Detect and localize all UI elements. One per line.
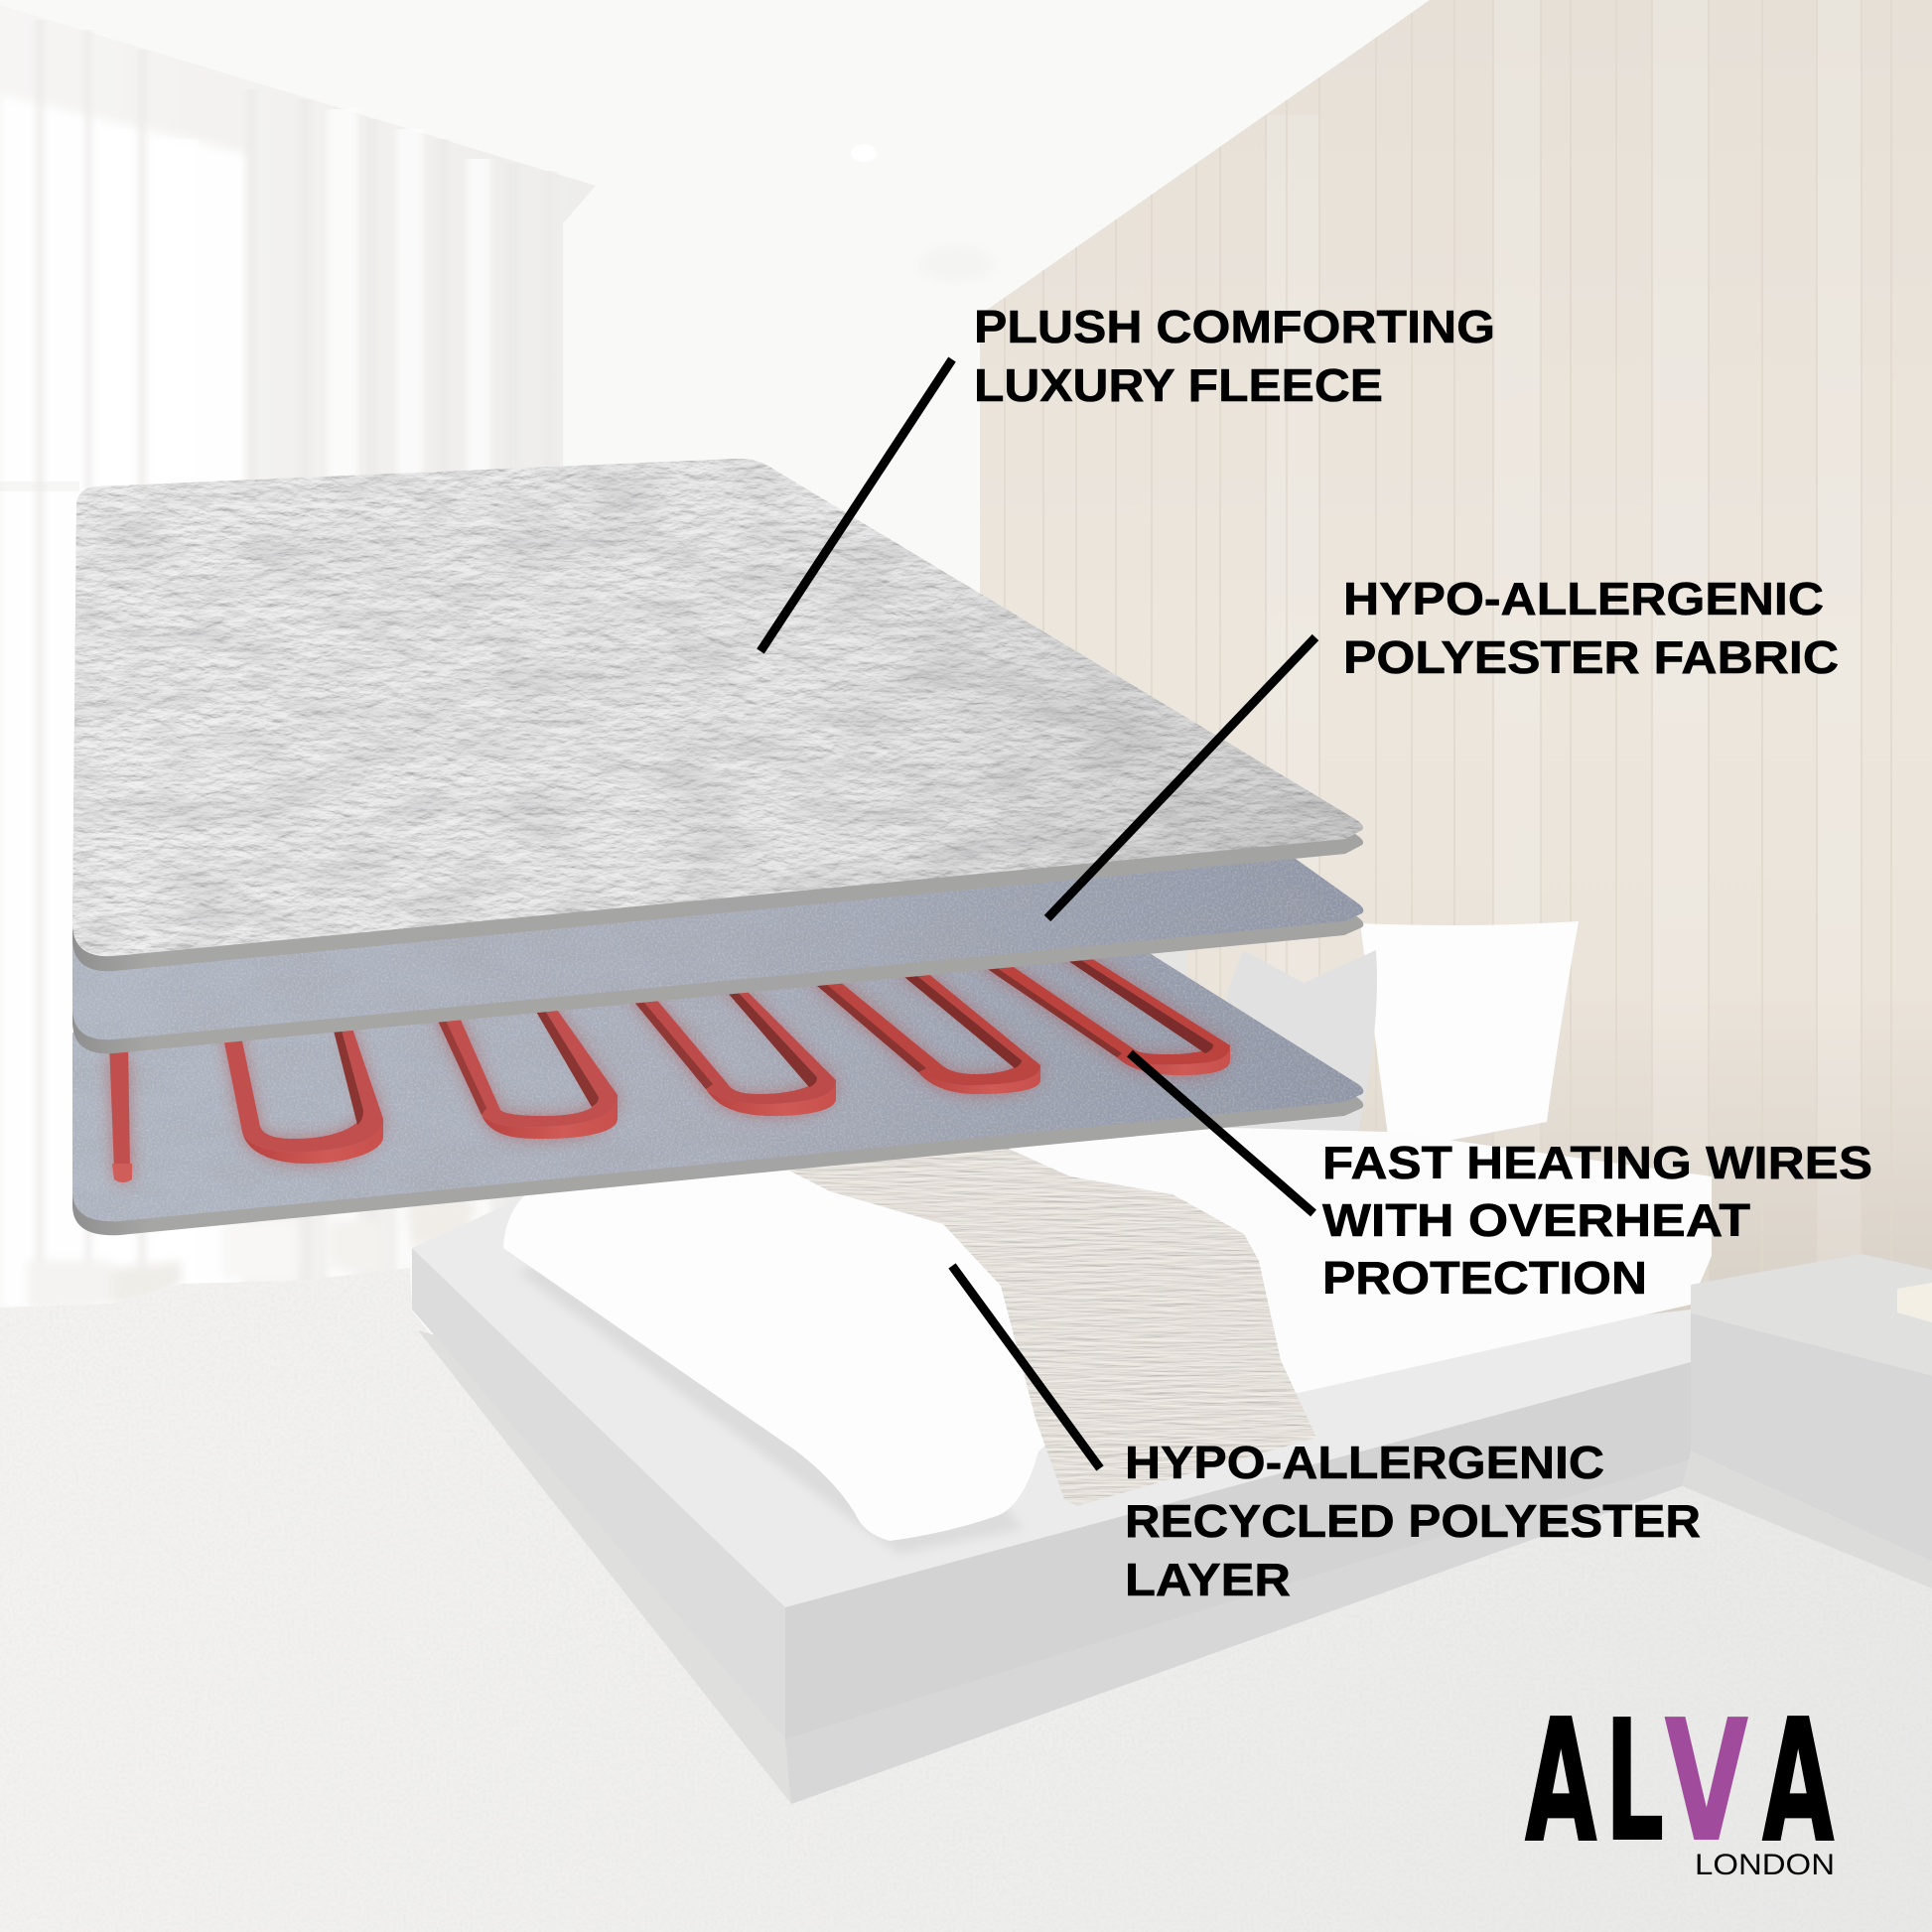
label: polyester fabric: POLYESTER FABRIC [1343, 631, 1839, 683]
layer: recycled polyester base [72, 953, 1364, 1235]
logo: ALVA London: L [1604, 1684, 1665, 1880]
label: heating wires: FAST HEATING WIRES [1322, 1137, 1872, 1188]
sheer curtains [0, 5, 596, 1311]
wire: lead end [109, 1042, 132, 1182]
wire: loop 5 [957, 948, 1230, 1075]
heating wires [109, 948, 1230, 1182]
logo: ALVA London [1525, 1683, 1835, 1881]
wire: loop 1 [220, 1023, 383, 1164]
label: heating wires: PROTECTION [1322, 1252, 1647, 1304]
label: polyester fabric [1343, 573, 1839, 683]
curtain hem [28, 1201, 477, 1310]
label: recycled polyester layer: RECYCLED POLYESTER [1125, 1495, 1701, 1547]
label: luxury fleece [974, 301, 1495, 411]
logo: ALVA London: LONDON [1695, 1849, 1835, 1881]
label: luxury fleece: PLUSH COMFORTING [974, 301, 1495, 352]
label: recycled polyester layer: LAYER [1125, 1554, 1291, 1605]
wire glow [109, 948, 1230, 1181]
leader: polyester fabric [1047, 637, 1315, 918]
near side duvet [503, 1142, 1092, 1541]
bedside table [1682, 1254, 1932, 1588]
logo: ALVA London: A [1525, 1685, 1596, 1880]
layer: polyester fabric [72, 858, 1364, 1054]
wire: loop 2 [425, 993, 618, 1139]
platform shadow under duvet [516, 1251, 1023, 1554]
wire: loop 3 [615, 978, 836, 1116]
label: luxury fleece: LUXURY FLEECE [974, 359, 1383, 411]
label: recycled polyester layer [1125, 1437, 1701, 1605]
leader: fleece [760, 359, 952, 651]
logo: ALVA London: A [1762, 1685, 1834, 1880]
label: recycled polyester layer: HYPO-ALLERGENIC [1125, 1437, 1604, 1488]
leader: heating wires [1130, 1053, 1313, 1213]
logo: ALVA London: V [1664, 1683, 1749, 1879]
layer: luxury fleece [60, 447, 1380, 973]
bed platform [412, 1191, 1691, 1804]
platform floor shadow [418, 1330, 1691, 1804]
throw blanket [790, 1149, 1316, 1506]
ceiling light [851, 144, 877, 162]
label: polyester fabric: HYPO-ALLERGENIC [1343, 573, 1824, 624]
wood panelled wall [980, 0, 1932, 1390]
leader: recycled layer [952, 1266, 1100, 1468]
ceiling speaker [918, 246, 994, 282]
label: heating wires: WITH OVERHEAT [1322, 1194, 1750, 1246]
far side duvet [993, 1122, 1712, 1393]
wire: loop 4 [796, 968, 1040, 1094]
leader lines [760, 359, 1315, 1468]
carpet floor [0, 1251, 1932, 1932]
cushions [1142, 921, 1579, 1155]
label: heating wires [1322, 1137, 1872, 1304]
